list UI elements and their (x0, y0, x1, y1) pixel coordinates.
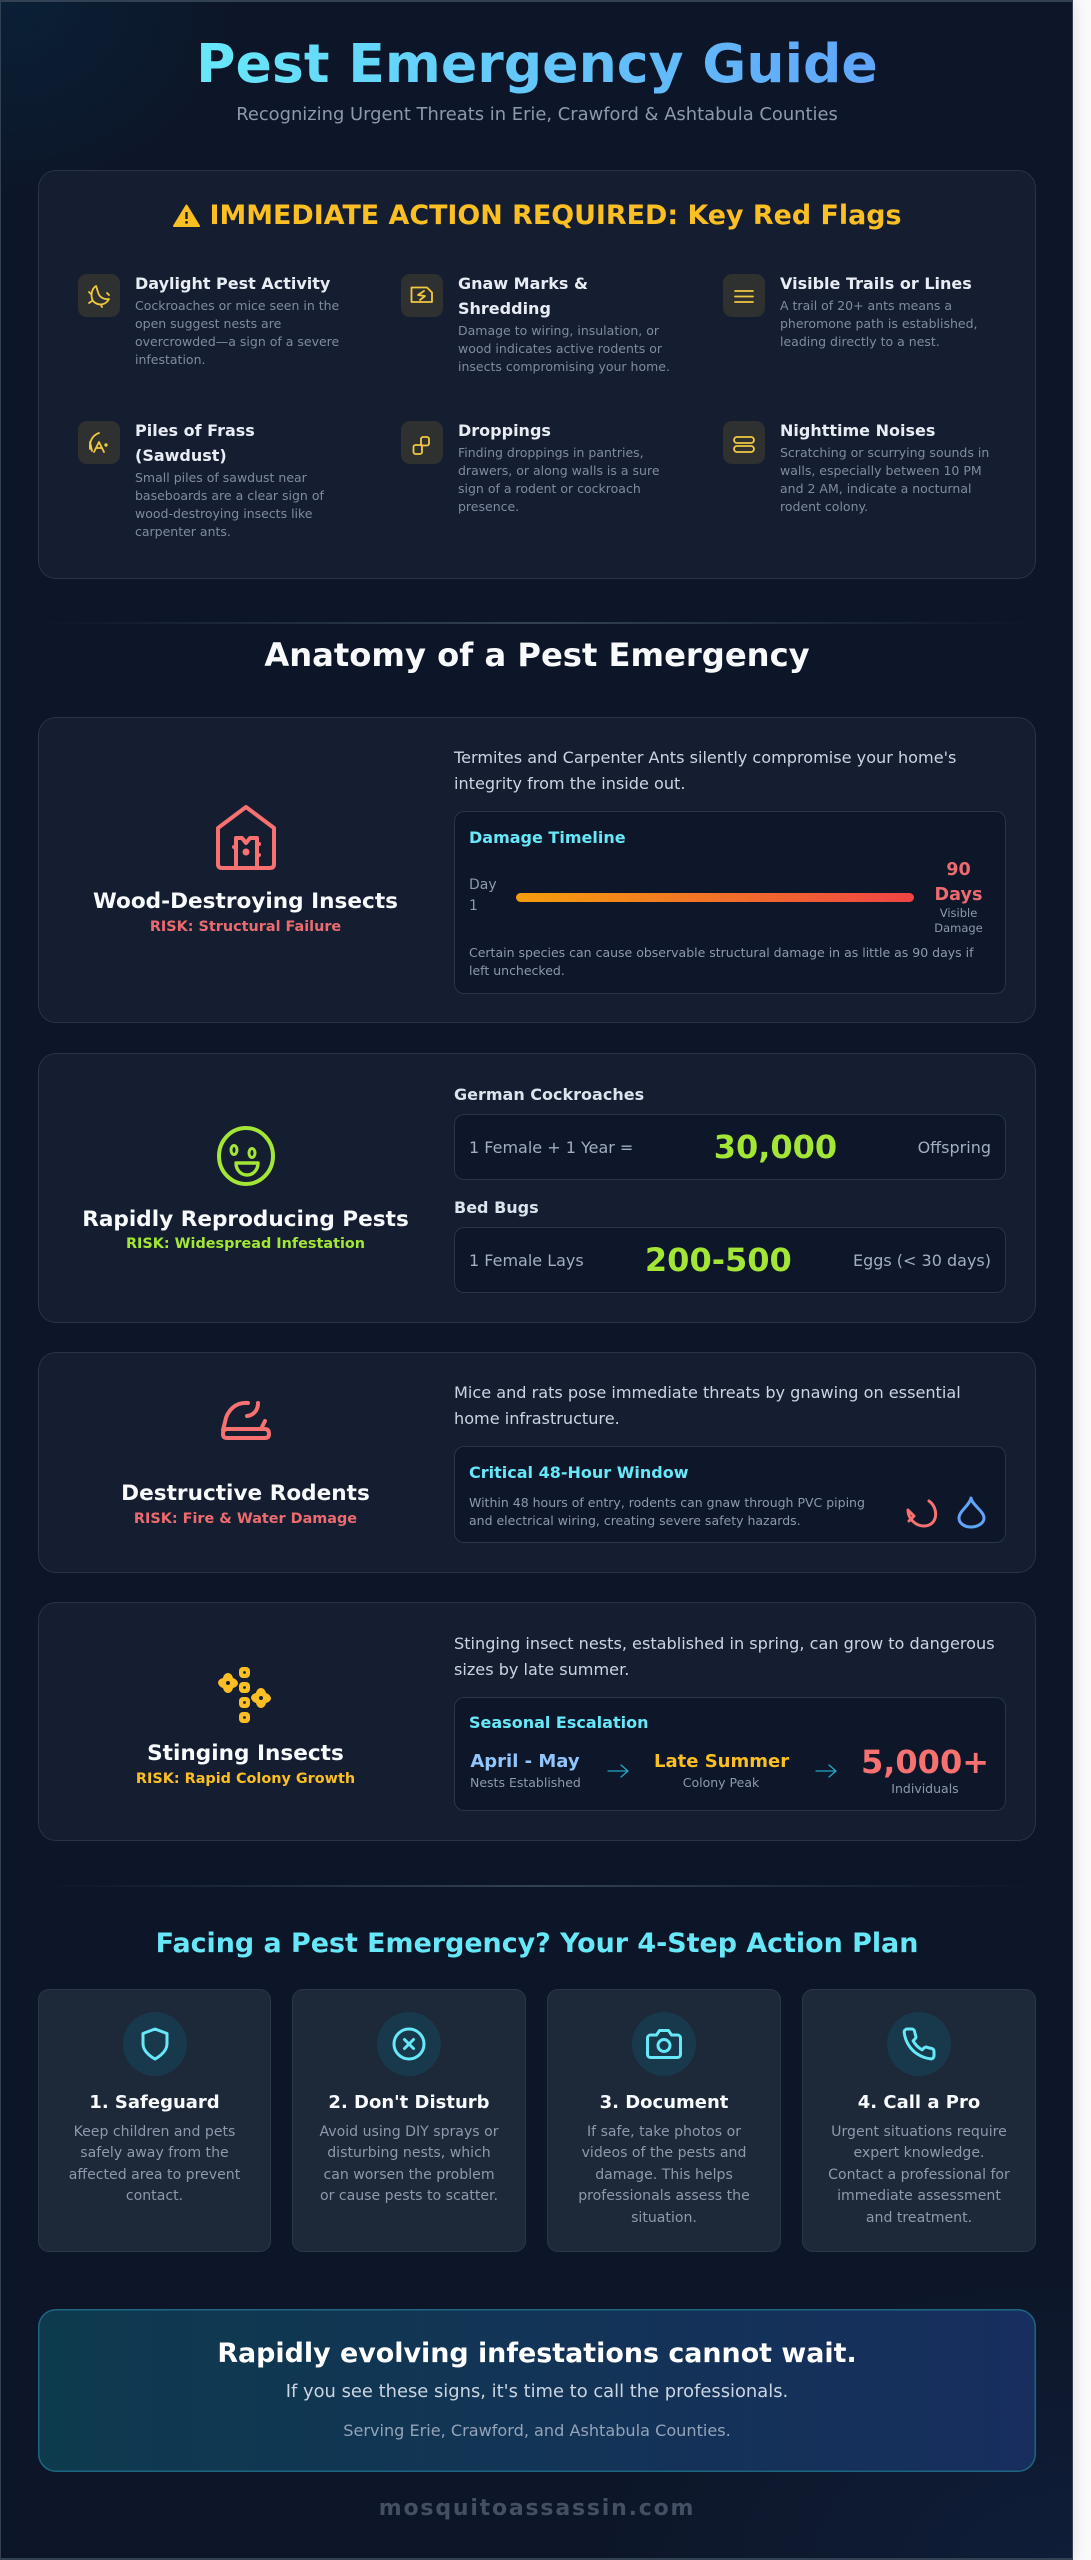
red flag: frass (78, 421, 324, 539)
panel: rapidly reproducing pests (38, 1053, 1036, 1323)
red flag: droppings (401, 421, 660, 514)
description: sizes by late summer. (454, 1660, 629, 1679)
red flag: visible trails: pheromone path is established, (780, 316, 978, 331)
stage: late summer: Colony Peak (683, 1775, 759, 1790)
icon: droppings (401, 421, 443, 464)
damage timeline box (454, 811, 1006, 994)
90 days label (935, 860, 982, 905)
step 4 card (802, 1989, 1036, 2252)
stat: german cockroaches: 30,000 (714, 1128, 837, 1166)
timeline caption (469, 945, 974, 978)
panel: stinging insects (38, 1602, 1036, 1841)
stat: german cockroaches: Offspring (918, 1138, 991, 1156)
step 3 card: situation. (631, 2210, 697, 2226)
icon: trail lines (723, 274, 765, 317)
heading: destructive rodents: Destructive Rodents (121, 1481, 370, 1506)
risk label: RISK: Structural Failure (150, 919, 341, 935)
red flag: nighttime noises (723, 421, 989, 514)
red flag: droppings: Finding droppings in pantries, (458, 445, 644, 460)
icon: smiling face (217, 1126, 275, 1186)
risk label: RISK: Fire & Water Damage (134, 1511, 357, 1527)
icon: fire (906, 1499, 938, 1528)
timeline title: Damage Timeline (469, 828, 626, 847)
timeline bar (516, 893, 914, 902)
red flag: frass: baseboards are a clear sign of (135, 488, 324, 503)
description: Mice and rats pose immediate threats by gnawing on essential (454, 1383, 961, 1402)
stage: late summer: Late Summer (654, 1751, 789, 1772)
red flag: droppings: sign of a rodent or cockroach (458, 481, 641, 496)
icon: rodent (221, 1400, 271, 1440)
risk label: RISK: Rapid Colony Growth (136, 1771, 355, 1787)
stat: german cockroaches: 1 Female + 1 Year = (469, 1138, 633, 1156)
step 4 card: immediate assessment (837, 2188, 1001, 2204)
red flag: nighttime noises: and 2 AM, indicate a nocturnal (780, 481, 971, 496)
stat: bed bugs: 1 Female Lays (469, 1250, 584, 1270)
label: bed bugs: Bed Bugs (454, 1198, 539, 1217)
step 1 card (38, 1989, 271, 2252)
arrow (815, 1764, 837, 1778)
visible damage label (934, 906, 983, 935)
step 3 card: professionals assess the (578, 2188, 750, 2204)
red flag: gnaw marks: Damage to wiring, insulation, or (458, 323, 659, 338)
cta service area: Serving Erie, Crawford, and Ashtabula Counties. (343, 2421, 731, 2440)
timeline caption: Certain species can cause observable structural damage in as little as 90 days if (469, 945, 973, 960)
red flag: droppings: drawers, or along walls is a sure (458, 463, 660, 478)
icon: shield (122, 2012, 186, 2076)
red flag: daylight pest activity: infestation. (135, 352, 205, 367)
stage: april-may: Nests Established (470, 1775, 581, 1790)
stage: 5000+: Individuals (891, 1781, 959, 1796)
step 3 card (547, 1989, 781, 2252)
step 4 card: and treatment. (866, 2210, 972, 2226)
step 4 card: expert knowledge. (853, 2145, 985, 2161)
red flag: gnaw marks: insects compromising your home. (458, 359, 670, 374)
step 4 card: Contact a professional for (828, 2167, 1010, 2183)
icon: sawdust pile (78, 421, 120, 464)
description (454, 1383, 961, 1428)
step 1 card: contact. (126, 2188, 183, 2204)
red flag: visible trails: Visible Trails or Lines (780, 274, 972, 293)
stage: april-may: April - May (470, 1751, 580, 1772)
red flag: visible trails: leading directly to a nest. (780, 334, 940, 349)
stage: april-may (470, 1751, 581, 1790)
icon: phone (887, 2012, 951, 2076)
footer website: mosquitoassassin.com (379, 2496, 695, 2521)
description: Termites and Carpenter Ants silently compromise your home's (454, 748, 956, 767)
red flag: nighttime noises: Scratching or scurrying sounds in (780, 445, 989, 460)
box text (469, 1495, 865, 1528)
icon: noise bars (723, 421, 765, 464)
red flag: visible trails: A trail of 20+ ants means a (780, 298, 952, 313)
90 days label: Days (935, 885, 982, 905)
icon: camera (632, 2012, 696, 2076)
day 1 label (469, 877, 497, 914)
red flag: nighttime noises: Nighttime Noises (780, 421, 935, 440)
heading: wood-destroying insects: Wood-Destroying Insects (93, 889, 398, 914)
step 4 card: 4. Call a Pro (858, 2092, 980, 2113)
day 1 label: Day (469, 877, 497, 893)
description: Stinging insect nests, established in spring, can grow to dangerous (454, 1634, 995, 1653)
heading: action plan: Facing a Pest Emergency? Your 4-Step Action Plan (156, 1928, 918, 1959)
90 days label: 90 (946, 860, 971, 880)
icon: water drop (958, 1496, 986, 1528)
icon: wasps cluster (218, 1667, 271, 1723)
red flag: frass: Small piles of sawdust near (135, 470, 307, 485)
cta heading: Rapidly evolving infestations cannot wait. (217, 2338, 857, 2369)
red flag: droppings: Droppings (458, 421, 551, 440)
description (454, 748, 956, 793)
description: integrity from the inside out. (454, 774, 685, 793)
heading: rapidly reproducing pests: Rapidly Reproducing Pests (82, 1207, 409, 1232)
red flag: frass: wood-destroying insects like (135, 506, 313, 521)
red flag: daylight pest activity: Cockroaches or mice seen in the (135, 298, 339, 313)
panel: wood-destroying insects (38, 717, 1036, 1023)
red flag: gnaw marks: wood indicates active rodents or (458, 341, 662, 356)
red flag: daylight pest activity: Daylight Pest Activity (135, 274, 330, 293)
step 3 card: damage. This helps (595, 2167, 733, 2183)
red flag: daylight pest activity: open suggest nests are (135, 316, 281, 331)
panel: destructive rodents (38, 1352, 1036, 1573)
red flag: nighttime noises: rodent colony. (780, 499, 868, 514)
risk label: RISK: Widespread Infestation (126, 1236, 365, 1252)
step 2 card: disturbing nests, which (327, 2145, 491, 2161)
step 1 card: 1. Safeguard (89, 2092, 220, 2113)
icon: house with door (216, 805, 276, 870)
red flag: visible trails (723, 274, 978, 349)
visible damage label: Visible (940, 906, 977, 920)
step 3 card: videos of the pests and (582, 2145, 746, 2161)
step 2 card: 2. Don't Disturb (328, 2092, 490, 2113)
step 2 card: or cause pests to scatter. (320, 2188, 498, 2204)
panel: red flags (38, 170, 1036, 579)
title: Pest Emergency Guide (196, 32, 878, 95)
box title: Critical 48-Hour Window (469, 1463, 688, 1482)
stat: bed bugs: 200-500 (645, 1241, 792, 1279)
seasonal escalation box (454, 1697, 1006, 1811)
step 2 card: Avoid using DIY sprays or (319, 2124, 499, 2140)
box text: Within 48 hours of entry, rodents can gnaw through PVC piping (469, 1495, 865, 1510)
step 2 card: can worsen the problem (323, 2167, 495, 2183)
step 2 card (292, 1989, 526, 2252)
red flag: frass: Piles of Frass (135, 421, 255, 440)
step 1 card: safely away from the (80, 2145, 229, 2161)
red flag: droppings: presence. (458, 499, 519, 514)
visible damage label: Damage (934, 921, 983, 935)
heading: anatomy: Anatomy of a Pest Emergency (264, 636, 810, 674)
red flag: gnaw marks (401, 274, 670, 374)
label: german cockroaches: German Cockroaches (454, 1085, 644, 1104)
description (454, 1634, 995, 1679)
box title: Seasonal Escalation (469, 1713, 648, 1732)
step 1 card: affected area to prevent (69, 2167, 240, 2183)
red flag: gnaw marks: Gnaw Marks & (458, 274, 588, 293)
step 4 card: Urgent situations require (831, 2124, 1007, 2140)
stat: bed bugs: Eggs (< 30 days) (853, 1250, 991, 1270)
stage: 5000+: 5,000+ (861, 1743, 989, 1781)
red flag: nighttime noises: walls, especially between 10 PM (780, 463, 982, 478)
description: home infrastructure. (454, 1409, 620, 1428)
icon: x circle (377, 2012, 441, 2076)
red flag: frass: carpenter ants. (135, 524, 231, 539)
red flag: daylight pest activity (78, 274, 339, 367)
subtitle: Recognizing Urgent Threats in Erie, Crawford & Ashtabula Counties (236, 104, 838, 125)
step 1 card: Keep children and pets (74, 2124, 235, 2140)
heading: immediate action: IMMEDIATE ACTION REQUIRED: Key Red Flags (210, 200, 901, 231)
timeline caption: left unchecked. (469, 963, 565, 978)
arrow (607, 1764, 629, 1778)
call to action panel (38, 2309, 1036, 2472)
stat: german cockroaches (454, 1114, 1006, 1180)
critical window box (454, 1446, 1006, 1543)
day 1 label: 1 (469, 898, 478, 914)
icon: gnawed document (401, 274, 443, 317)
step 3 card: 3. Document (600, 2092, 728, 2113)
cta subtext: If you see these signs, it's time to call the professionals. (286, 2381, 788, 2402)
box text: and electrical wiring, creating severe safety hazards. (469, 1513, 801, 1528)
red flag: gnaw marks: Shredding (458, 299, 551, 318)
step 3 card: If safe, take photos or (587, 2124, 741, 2140)
stage: late summer (654, 1751, 790, 1790)
stat: bed bugs (454, 1227, 1006, 1293)
icon: roach (78, 274, 120, 317)
red flag: frass: (Sawdust) (135, 446, 227, 465)
red flag: daylight pest activity: overcrowded—a sign of a severe (135, 334, 339, 349)
heading: stinging insects: Stinging Insects (147, 1741, 344, 1766)
